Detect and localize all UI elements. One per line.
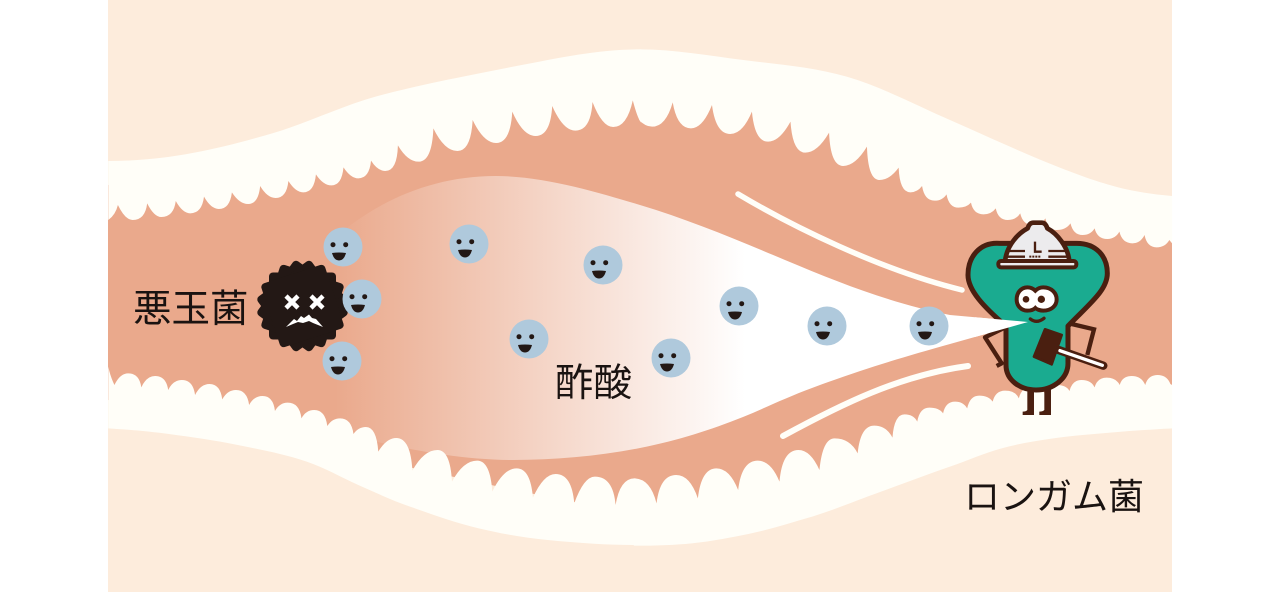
- helmet marks: [1007, 242, 1067, 257]
- intestinal wall: top: [108, 49, 1172, 247]
- right pupil: [1038, 296, 1045, 303]
- handle highlight: [1060, 351, 1102, 365]
- legs: [1023, 388, 1051, 415]
- intestinal wall: bottom: [108, 367, 1172, 546]
- character: longum bacteria: [968, 223, 1107, 415]
- dome: [1005, 223, 1069, 262]
- label: longum bacteria: ロンガム菌: [964, 476, 1144, 517]
- left arm: [985, 328, 1003, 366]
- label: acetic acid: 酢酸: [555, 362, 632, 405]
- character: bad bacteria: [256, 259, 349, 353]
- eye outline: [1017, 287, 1057, 311]
- intestine lumen: [108, 90, 1172, 515]
- molecule: [720, 286, 758, 326]
- molecule: [510, 320, 548, 358]
- molecule: [324, 228, 362, 266]
- eyes: [1017, 287, 1057, 311]
- acetic acid molecules: [322, 224, 948, 380]
- molecule: [584, 246, 622, 284]
- hammer: [1034, 329, 1103, 366]
- handle: [1057, 349, 1103, 366]
- molecule: [450, 224, 488, 264]
- molecule: [910, 306, 948, 346]
- acid jet tip over character: [975, 317, 1028, 337]
- smile: [1030, 318, 1044, 321]
- molecule: [652, 338, 690, 378]
- molecule: [808, 306, 846, 346]
- left pupil: [1023, 296, 1029, 303]
- helmet dots: [1029, 254, 1041, 260]
- motion streak: lower: [783, 366, 968, 436]
- x eyes: [286, 296, 323, 308]
- helmet: [998, 223, 1076, 267]
- hammer head: [1034, 329, 1062, 364]
- label: bad bacteria: 悪玉菌: [133, 288, 249, 331]
- jagged mouth: [286, 314, 323, 327]
- brim: [998, 261, 1076, 267]
- right arm: [1072, 324, 1094, 355]
- molecule: [322, 342, 362, 380]
- spiky body: [256, 259, 349, 353]
- motion streak: upper: [738, 194, 962, 290]
- molecule: [342, 280, 382, 318]
- body: [968, 243, 1107, 390]
- acetic acid cone gradient: [330, 176, 1028, 460]
